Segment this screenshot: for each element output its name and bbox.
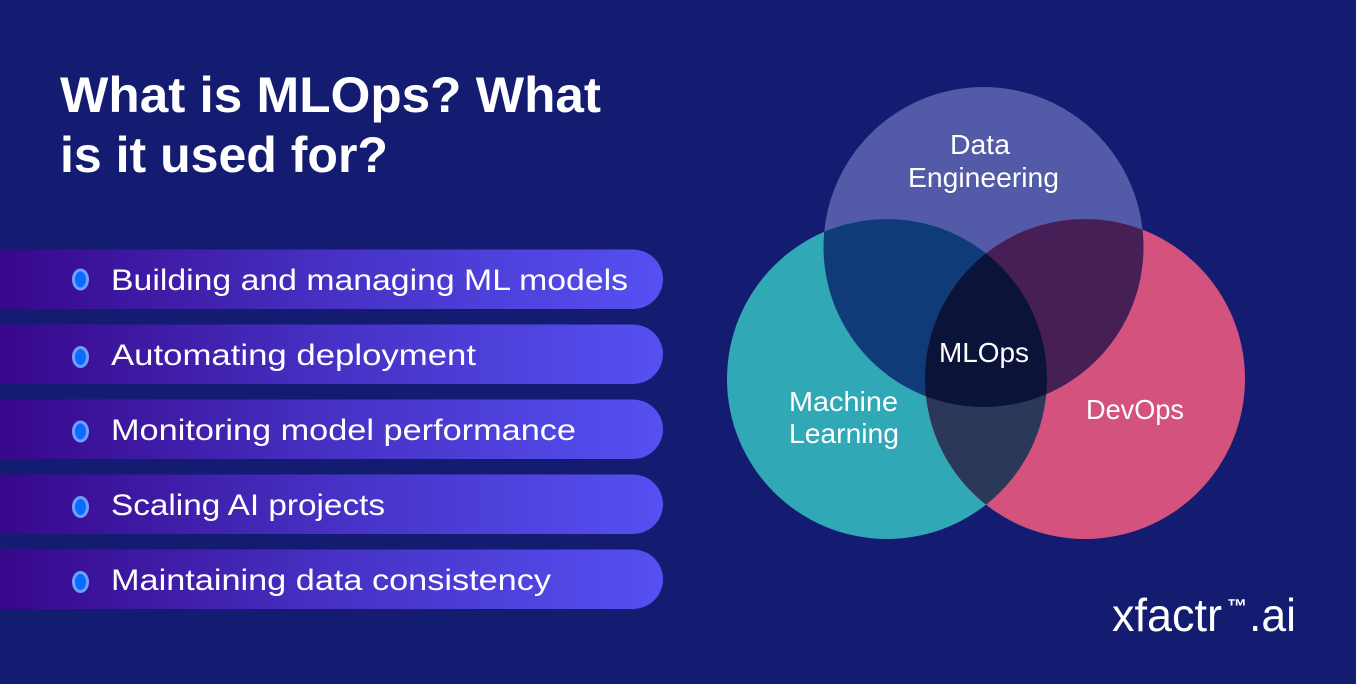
list item: automating deployment bbox=[0, 324, 663, 384]
logo: xfactr.ai: .ai bbox=[1249, 589, 1296, 641]
list item: automating deployment: Automating deployment bbox=[111, 339, 477, 372]
label: data engineering: Engineering bbox=[908, 162, 1059, 193]
list item: scaling AI projects: Scaling AI projects bbox=[111, 489, 385, 522]
title: What is MLOps? What bbox=[60, 67, 601, 123]
title: is it used for? bbox=[60, 127, 388, 183]
overlap: machine learning and devops bbox=[926, 394, 1046, 504]
list item: monitoring model performance bbox=[0, 400, 663, 459]
logo: xfactr.ai: xfactr bbox=[1112, 589, 1222, 641]
circle: devops bbox=[925, 219, 1245, 539]
list of MLOps uses bbox=[0, 250, 663, 609]
logo: xfactr.ai bbox=[1112, 589, 1296, 641]
overlap: machine learning and data engineering bbox=[824, 219, 1046, 396]
circle: machine learning bbox=[727, 219, 1047, 539]
list item: building and managing ML models: Building and managing ML models bbox=[111, 264, 628, 297]
label: MLOps: MLOps bbox=[939, 337, 1029, 368]
label: devops: DevOps bbox=[1086, 394, 1184, 425]
list item: scaling AI projects bbox=[0, 474, 663, 534]
title bbox=[60, 67, 601, 183]
overlap: center MLOps bbox=[925, 254, 1047, 407]
list item: maintaining data consistency: Maintaining data consistency bbox=[111, 564, 551, 597]
label: machine learning: Learning bbox=[789, 418, 899, 449]
label: data engineering bbox=[908, 129, 1059, 193]
label: data engineering: Data bbox=[950, 129, 1010, 160]
label: machine learning bbox=[789, 386, 899, 449]
list item: maintaining data consistency bbox=[0, 550, 663, 609]
list item: monitoring model performance: Monitoring model performance bbox=[111, 414, 576, 447]
label: machine learning: Machine bbox=[789, 386, 898, 417]
logo: xfactr.ai: ™ bbox=[1227, 596, 1247, 618]
circle: data engineering bbox=[824, 87, 1144, 407]
venn diagram bbox=[727, 87, 1245, 539]
overlap: devops and data engineering bbox=[986, 219, 1144, 394]
list item: building and managing ML models bbox=[0, 250, 663, 309]
